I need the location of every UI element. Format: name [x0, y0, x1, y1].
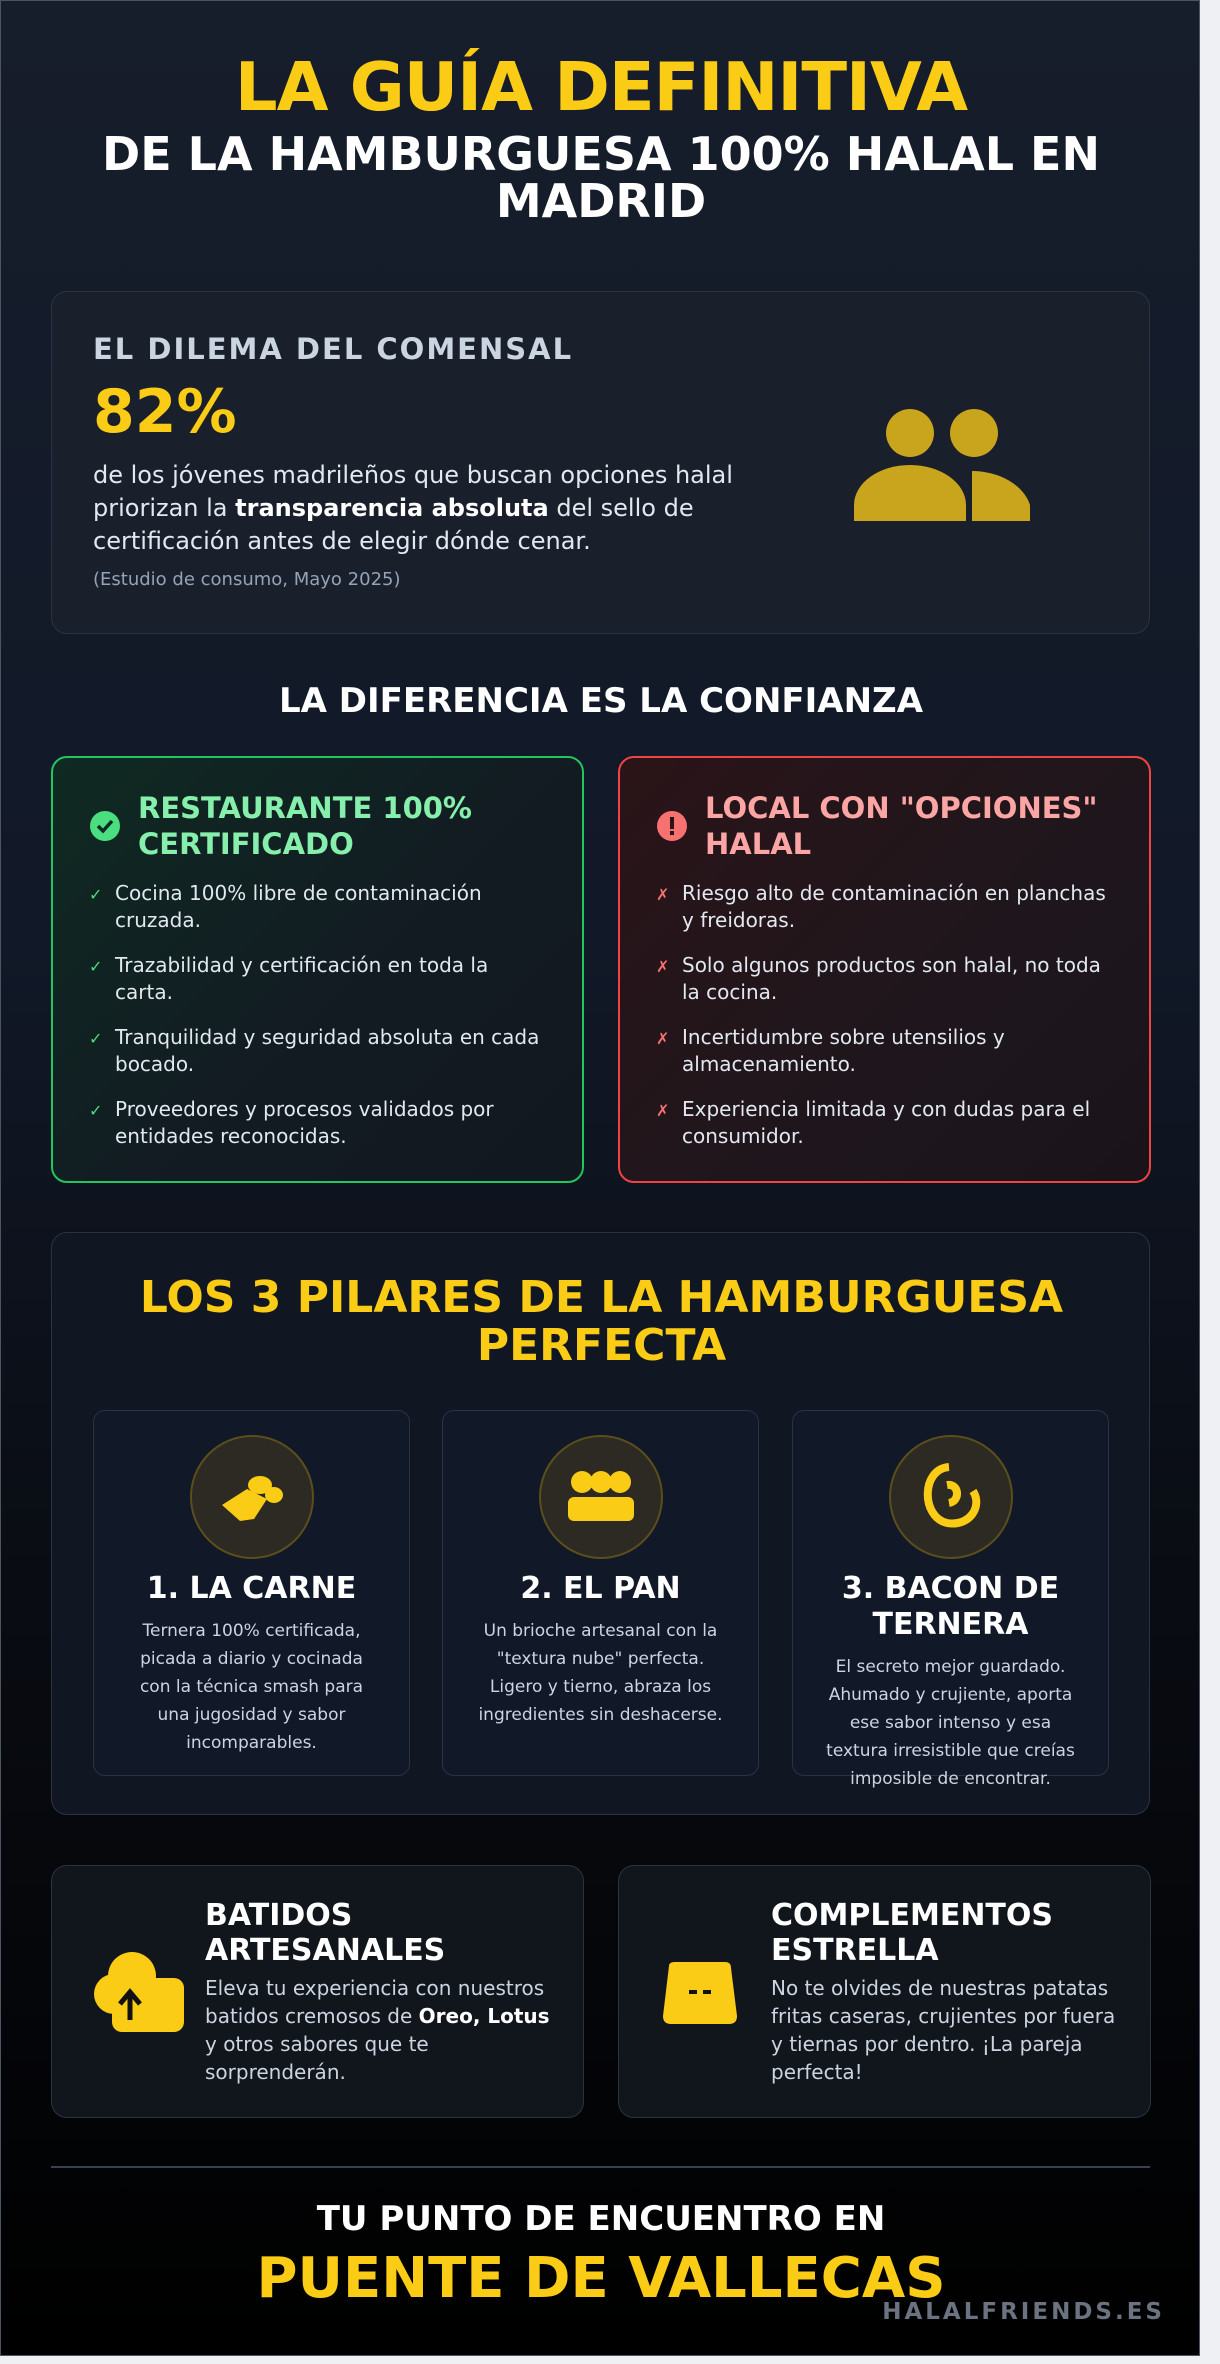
pillar: carne: Ternera 100% certificada, picada a diario y cocinada con la técnica smash para una jugosidad y sabor incomparables. — [140, 1621, 363, 1753]
footer: location: TU PUNTO DE ENCUENTRO EN — [317, 2199, 885, 2239]
pillar: pan: Un brioche artesanal con la "textura nube" perfecta. Ligero y tierno, abraza los ingredientes sin deshacerse. — [478, 1621, 723, 1725]
heading: certified: CERTIFICADO — [138, 827, 354, 861]
panel: batidos — [51, 1865, 584, 2118]
heading: pillars — [140, 1272, 1063, 1371]
pillar: pan: 2. EL PAN — [520, 1571, 681, 1606]
icon: warning — [657, 811, 687, 841]
list: pros — [89, 881, 539, 1148]
heading: complementos — [771, 1898, 1053, 1968]
heading: certified: RESTAURANTE 100% — [138, 791, 472, 825]
title — [102, 48, 1100, 228]
heading: pillars: PERFECTA — [477, 1320, 726, 1371]
pillar: bacon: El secreto mejor guardado. Ahumado y crujiente, aporta ese sabor intenso y esa textura irresistible que creías imposible de encontrar. — [826, 1657, 1075, 1789]
pillar: carne: 1. LA CARNE — [147, 1571, 356, 1606]
heading: complementos: COMPLEMENTOS — [771, 1898, 1053, 1933]
heading: complementos: ESTRELLA — [771, 1933, 939, 1968]
list: cons — [656, 881, 1106, 1148]
list: cons: Experiencia limitada y con dudas para el consumidor. — [682, 1097, 1090, 1148]
pillar: bacon: TERNERA — [872, 1607, 1028, 1642]
panel: complementos — [618, 1865, 1151, 2118]
icon: fries — [663, 1962, 737, 2024]
pillar: carne — [93, 1410, 410, 1776]
icon: bread — [539, 1435, 663, 1559]
heading: batidos: ARTESANALES — [205, 1933, 445, 1968]
heading: difference: LA DIFERENCIA ES LA CONFIANZA — [279, 681, 923, 721]
footer: brand: HALALFRIENDS.ES — [882, 2299, 1165, 2325]
panel: options — [618, 756, 1151, 1183]
list: cons: Incertidumbre sobre utensilios y almacenamiento. — [682, 1025, 1005, 1076]
icon: bacon — [889, 1435, 1013, 1559]
heading: pillars: LOS 3 PILARES DE LA HAMBURGUESA — [140, 1272, 1063, 1323]
list: pros: Tranquilidad y seguridad absoluta en cada bocado. — [115, 1025, 539, 1076]
text block: de los jóvenes madrileños que buscan opciones halal priorizan la transparencia absoluta del sello de certificación antes de elegir dónde cenar. — [93, 461, 733, 555]
heading: batidos: BATIDOS — [205, 1898, 352, 1933]
list: pros: ✓ — [89, 885, 102, 904]
pillar: bacon: 3. BACON DE — [842, 1571, 1059, 1606]
pillar: pan — [442, 1410, 759, 1776]
text: batidos: Eleva tu experiencia con nuestros batidos cremosos de Oreo, Lotus y otros sabores que te sorprenderán. — [205, 1976, 550, 2084]
text: complementos: No te olvides de nuestras patatas fritas caseras, crujientes por fuera y tiernas por dentro. ¡La pareja perfecta! — [771, 1976, 1115, 2084]
list: cons: Solo algunos productos son halal, no toda la cocina. — [682, 953, 1101, 1004]
heading: certified — [138, 791, 472, 861]
source note: (Estudio de consumo, Mayo 2025) — [93, 569, 400, 590]
stat 82%: 82% — [93, 377, 237, 447]
list: cons: ✗ — [656, 957, 669, 976]
list: cons: ✗ — [656, 885, 669, 904]
heading: options — [705, 791, 1098, 861]
list: pros: Trazabilidad y certificación en toda la carta. — [115, 953, 488, 1004]
list: pros: ✓ — [89, 1101, 102, 1120]
list: cons: Riesgo alto de contaminación en planchas y freidoras. — [682, 881, 1106, 932]
list: cons: ✗ — [656, 1029, 669, 1048]
icon: people — [854, 409, 1030, 521]
list: pros: Proveedores y procesos validados por entidades reconocidas. — [115, 1097, 494, 1148]
icon: check — [90, 811, 120, 841]
heading: dilemma: EL DILEMA DEL COMENSAL — [93, 332, 573, 366]
footer: location: PUENTE DE VALLECAS — [256, 2246, 946, 2311]
title: DE LA HAMBURGUESA 100% HALAL EN — [102, 127, 1100, 181]
panel: certified — [51, 756, 584, 1183]
list: pros: Cocina 100% libre de contaminación cruzada. — [115, 881, 482, 932]
icon: meat — [190, 1435, 314, 1559]
panel: dilemma — [51, 291, 1150, 634]
list: pros: ✓ — [89, 1029, 102, 1048]
title: MADRID — [496, 174, 706, 228]
title: LA GUÍA DEFINITIVA — [235, 48, 967, 126]
heading: batidos — [205, 1898, 445, 1968]
panel: pillars — [51, 1232, 1150, 1815]
heading: options: LOCAL CON "OPCIONES" — [705, 791, 1098, 825]
pillar: bacon — [792, 1410, 1109, 1776]
icon: shake — [94, 1952, 184, 2032]
heading: options: HALAL — [705, 827, 811, 861]
footer: location — [256, 2199, 946, 2311]
list: pros: ✓ — [89, 957, 102, 976]
list: cons: ✗ — [656, 1101, 669, 1120]
